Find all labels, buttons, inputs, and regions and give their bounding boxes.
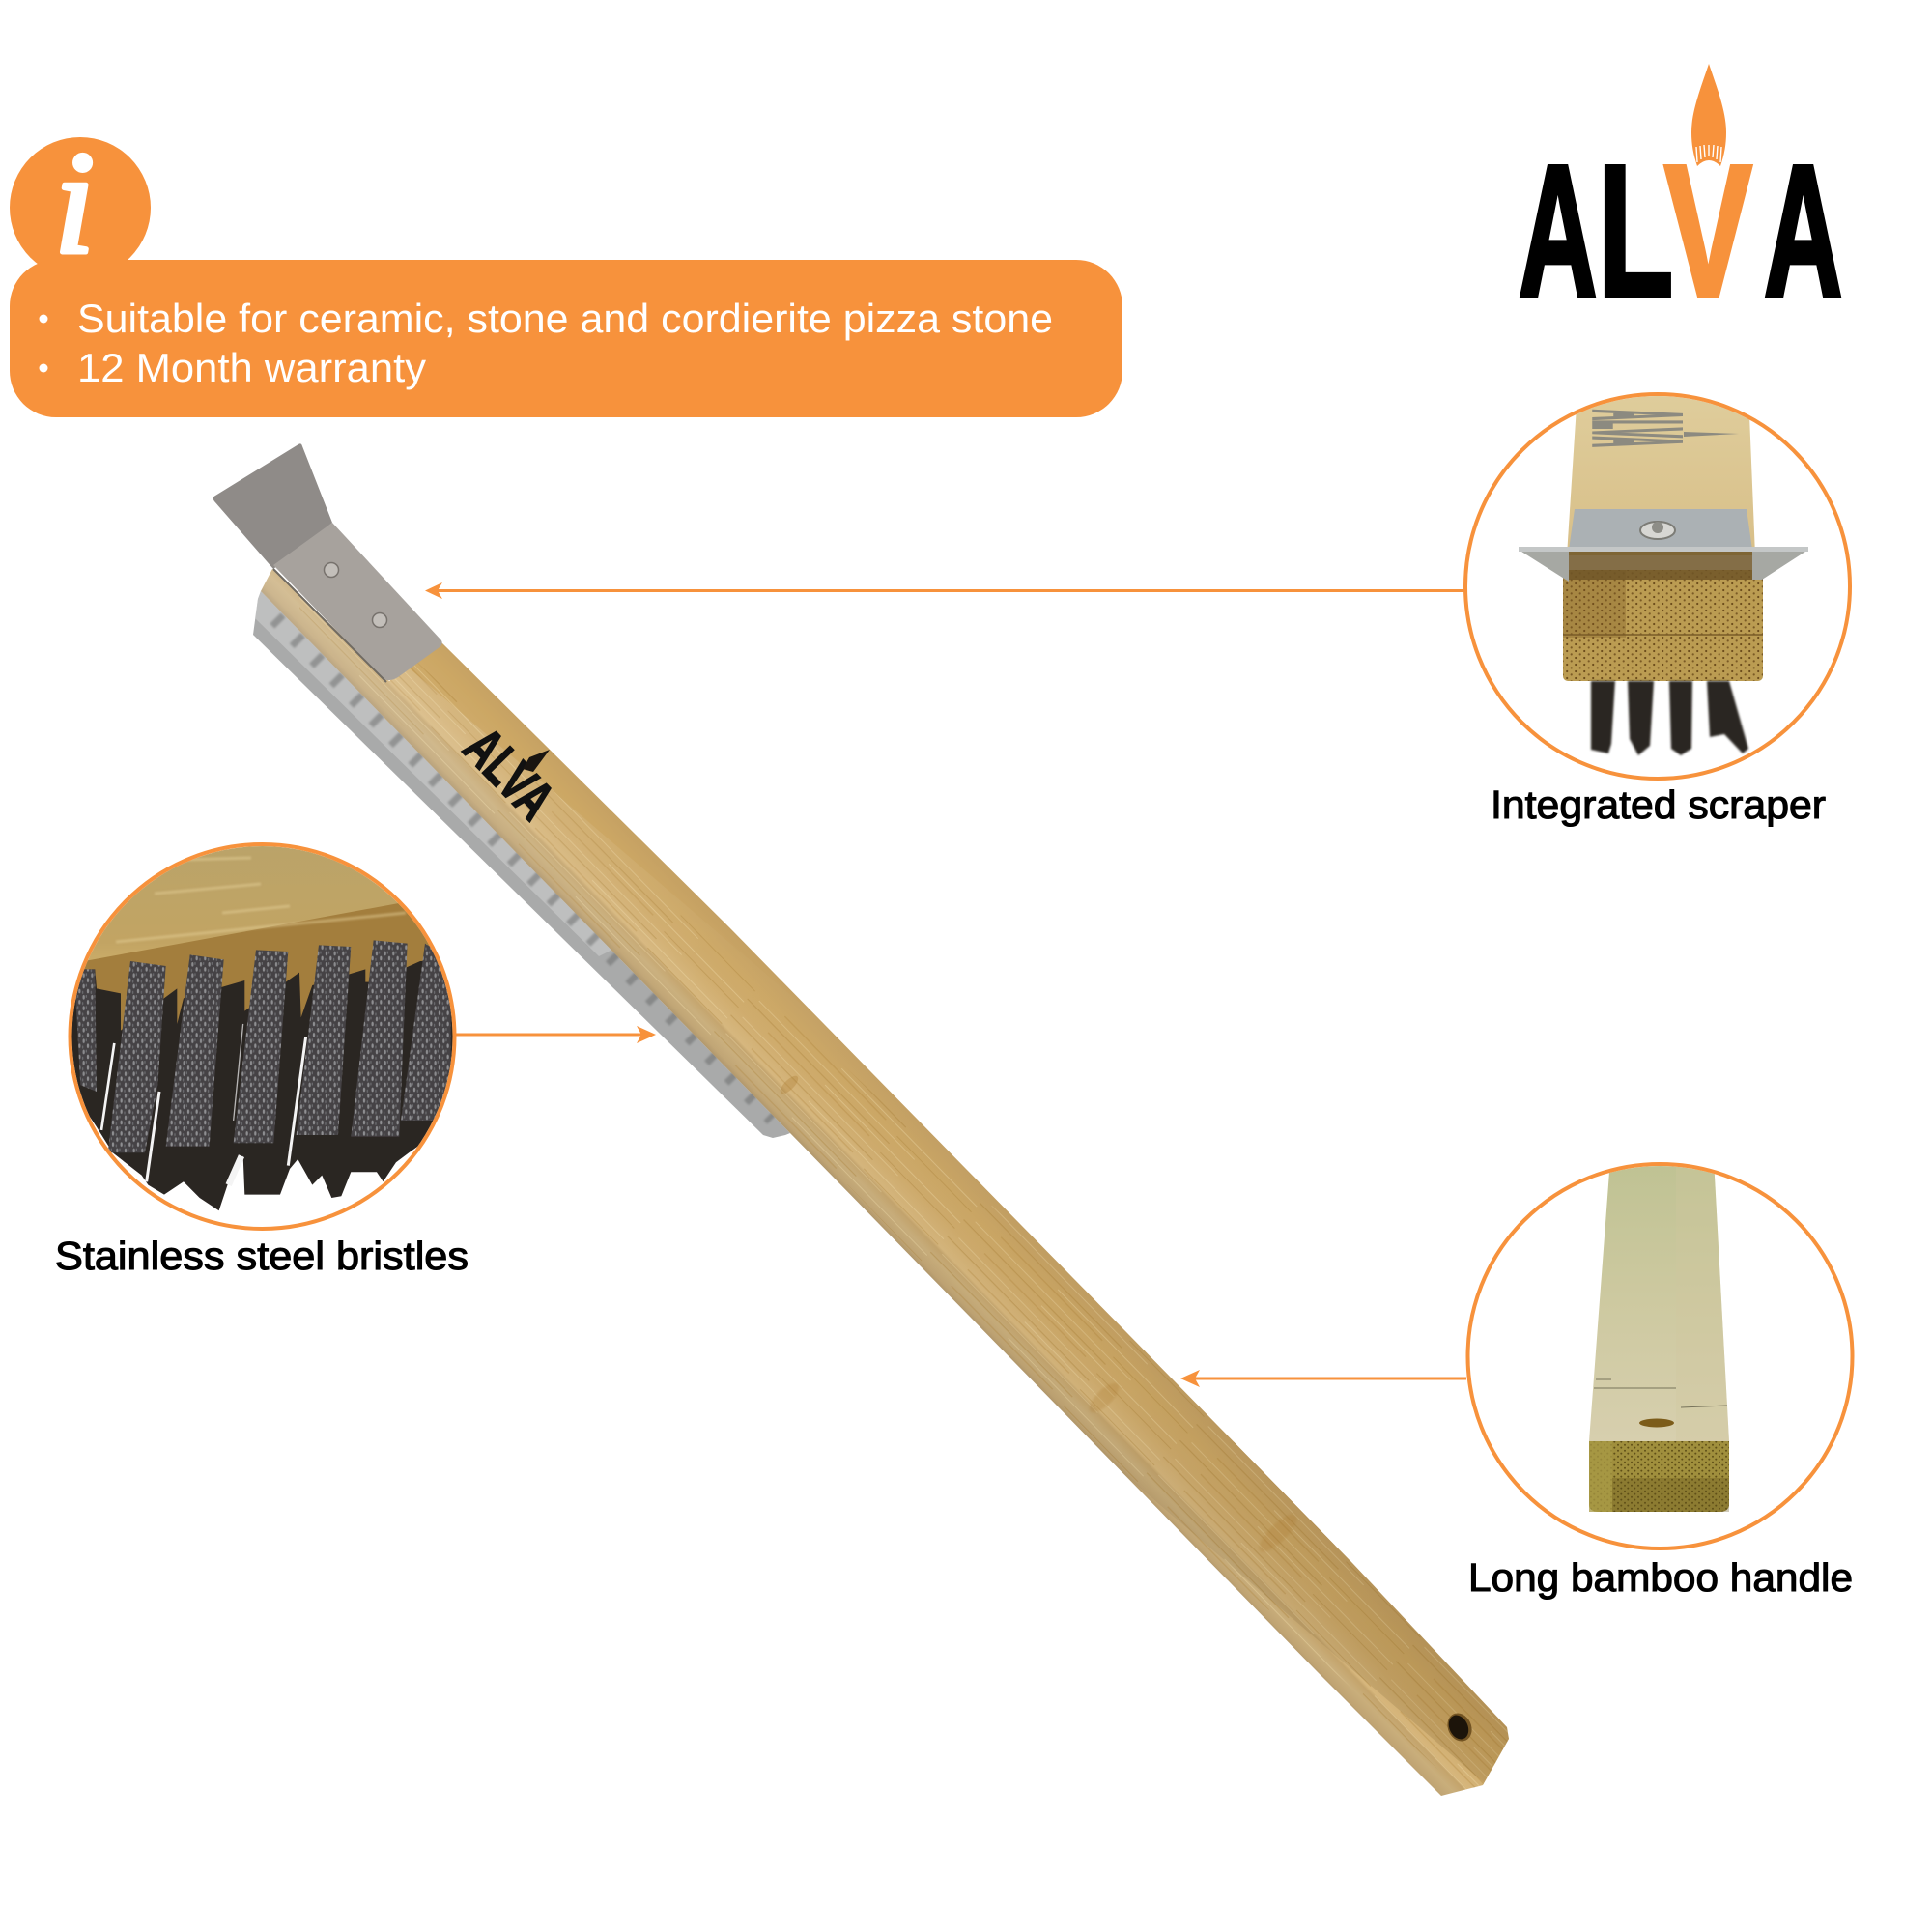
bullet list: Suitable for ceramic, stone and cordierite pizza stone bbox=[77, 296, 1053, 341]
product: bamboo handle bbox=[261, 569, 1509, 1796]
label: long bamboo handle: Long bamboo handle bbox=[1468, 1555, 1853, 1600]
arrow: to bristles bbox=[454, 1026, 656, 1043]
ALVA logo bbox=[1519, 64, 1842, 336]
panel: stainless steel bristles bbox=[58, 831, 473, 1229]
product: steel scraper bbox=[213, 443, 442, 682]
end bristles bbox=[1591, 681, 1748, 755]
end grain block bbox=[1589, 1441, 1729, 1512]
panel: integrated scraper bbox=[1465, 391, 1850, 779]
product: printed logo on handle: ALVA bbox=[452, 716, 567, 832]
bullet list bbox=[39, 296, 1053, 390]
arrow: to handle bbox=[1180, 1370, 1466, 1387]
info icon bbox=[10, 122, 151, 284]
product: printed logo on handle bbox=[452, 716, 567, 832]
screws bbox=[325, 562, 386, 628]
end grain block bbox=[1563, 570, 1763, 681]
panel: integrated scraper: ALVA bbox=[1570, 410, 1706, 447]
ALVA logo: A bbox=[1519, 126, 1597, 336]
product: bristle block bbox=[253, 591, 790, 1138]
drill hole bbox=[1639, 1418, 1674, 1428]
label: integrated scraper: Integrated scraper bbox=[1491, 782, 1826, 827]
ALVA logo: A bbox=[1764, 126, 1842, 336]
scraper blade bbox=[1569, 509, 1752, 550]
info icon: i bbox=[54, 122, 95, 284]
panel: long bamboo handle bbox=[1468, 1159, 1853, 1548]
bullet list: 12 Month warranty bbox=[77, 345, 426, 390]
hanging hole bbox=[1443, 1709, 1476, 1746]
arrow: to scraper bbox=[425, 582, 1468, 599]
info banner bbox=[10, 260, 1122, 417]
label: stainless steel bristles: Stainless steel bristles bbox=[55, 1234, 469, 1278]
ALVA logo: L bbox=[1598, 126, 1673, 335]
ALVA logo: V bbox=[1664, 127, 1752, 336]
